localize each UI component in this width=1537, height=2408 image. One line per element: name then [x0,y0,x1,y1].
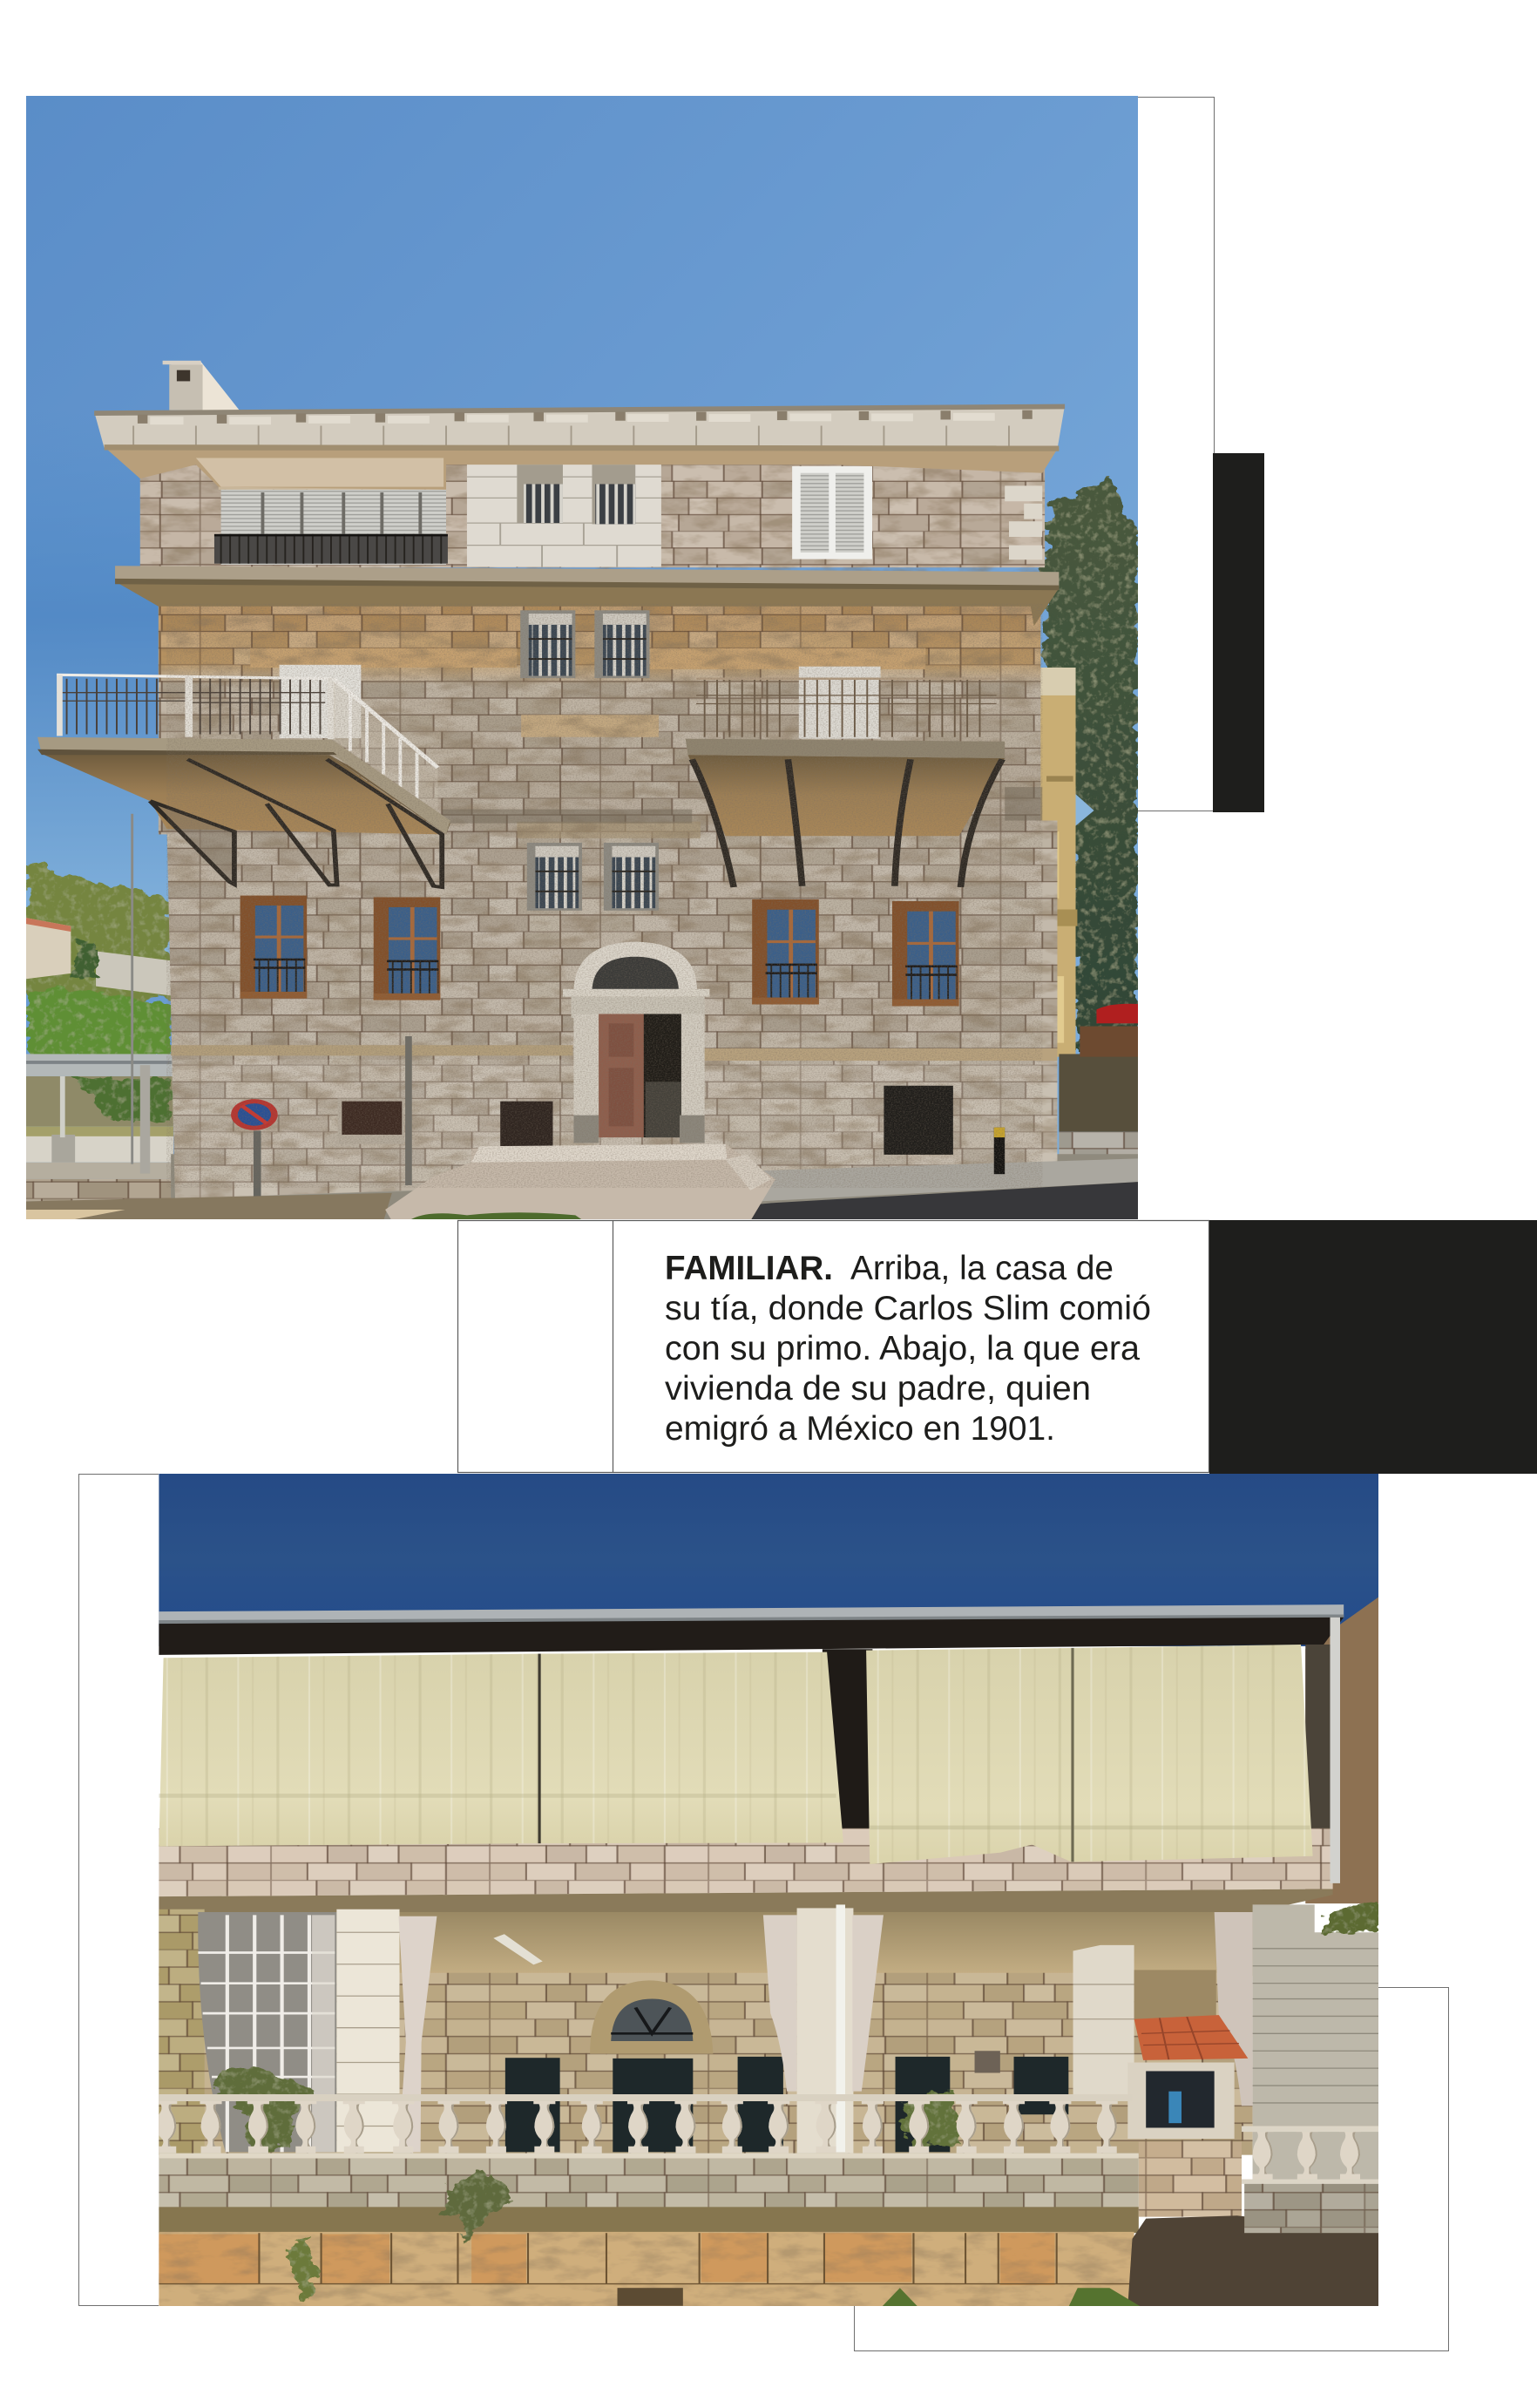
basement window 3 [884,1086,953,1155]
ground backing [171,1154,1138,1221]
tan band left [171,1045,572,1055]
entrance portal [563,942,709,1143]
wall: middle storey [159,600,1040,834]
road sign [231,1099,278,1200]
background: pine trees right [1042,477,1138,1048]
sky lower left tint [26,519,170,955]
tan band right [702,1048,1057,1061]
wall lantern [975,2051,1000,2072]
stone band [159,1828,1333,1896]
photo: aunt's stone house [26,96,1138,1221]
roof slab [94,404,1065,451]
creeper left [288,2236,318,2303]
background: right wall and red canopy [1059,1004,1138,1160]
window: white shutters [792,466,872,560]
dark corner [1134,1970,1216,2019]
window: lower left 2 [374,897,440,1001]
tile roof shrine [1127,2015,1248,2139]
balcony: left [37,675,450,887]
lower scene [155,1473,1380,2307]
ceiling [159,1889,1333,1912]
caption frame [458,1220,1209,1473]
frame: upper photo right outline [1138,98,1215,811]
caption line 3: con su primo. Abajo, la que era [665,1330,1140,1367]
gap behind curtains [823,1649,872,1835]
bushes at steps [409,1212,584,1221]
sidewalk right [755,1158,1138,1201]
background: tan tower [1039,668,1077,1057]
window: lower right 1 [752,899,819,1004]
dark stains under balconies [442,787,1042,824]
curtain: right group [866,1645,1313,1864]
curtain: left group [159,1652,843,1846]
basement window 1 [338,1098,404,1144]
eave soffit [105,447,1057,490]
window: lower right 2 [892,901,959,1006]
bottom shrubs [882,2288,1141,2307]
left wall [159,1909,205,2155]
ground left [26,1193,392,1221]
sky gap between trees [1075,794,1094,826]
pillar centre [797,1904,853,2154]
curved glazed window [198,1912,336,2152]
pillar left [336,1909,400,2152]
dark roof underside [159,1618,1344,1655]
window: top storey recess with blinds [214,486,448,565]
porch back wall [159,1973,1253,2155]
balcony: right [686,679,1005,887]
potted plants [1324,1901,1380,1932]
bollard [994,1128,1005,1174]
drape centre left [763,1915,797,2092]
mid cornice [115,566,1059,626]
caption line 4: vivienda de su padre, quien [665,1370,1091,1407]
plant left [212,2068,316,2149]
shrine base [1139,2141,1242,2217]
orange stone base [159,2232,1134,2307]
door behind right balcony [799,667,881,739]
window: lower left 1 [240,896,307,999]
stone grain overlay [166,604,1042,1188]
entrance steps [385,1144,775,1221]
earth slope [1127,2215,1380,2307]
chimney [163,361,240,410]
pillar right [1073,1945,1134,2094]
frame: lower photo right outline [854,1987,1448,2351]
building scene [26,361,1138,1221]
drape centre right [852,1915,884,2092]
photo: father's house [155,1473,1380,2307]
tall pole [131,814,133,1164]
rain pipe [1330,1618,1340,1883]
gutter pipe [405,1036,412,1185]
black bar: upper right [1213,453,1264,812]
black block: caption right [1209,1220,1537,1474]
caption lead-in: FAMILIAR. [665,1250,833,1287]
windows: lower storey pair [527,843,659,911]
wall: lower storey [166,820,1057,1198]
wall weathering [140,462,1057,1201]
door behind left balcony [280,665,361,738]
drape right [1215,1912,1253,2106]
sky [26,96,1138,1219]
door panels [505,2057,1068,2152]
drape left [398,1916,437,2152]
right base wall [1244,2184,1380,2233]
basement window 2 [500,1102,552,1147]
background: hill and left town [26,859,176,1201]
hanging plant [440,2169,513,2244]
plant centre [900,2090,959,2147]
caption line 2: su tía, donde Carlos Slim comió [665,1290,1151,1327]
arch window [590,1980,713,2054]
right neighbour wall [1305,1596,1380,1903]
quoins right [1005,485,1042,560]
caption line 1: Arriba, la casa de [850,1250,1114,1287]
block: white stone with two small windows [467,460,661,567]
caption line 5: emigró a México en 1901. [665,1410,1055,1448]
sky [159,1473,1380,1646]
roof gutter [159,1604,1344,1624]
lamp [493,1934,543,1964]
frame: lower photo left outline [78,1475,159,2306]
balustrade [155,2094,1133,2154]
parapet [159,2154,1139,2210]
road [584,1182,1138,1221]
dark stain band [159,2207,1139,2233]
right balustrade [1242,2126,1380,2184]
right wall blocks [1253,1904,1380,2181]
wall: top storey [140,462,1045,567]
windows: middle storey pair [520,610,650,678]
caption text [665,1250,1151,1448]
